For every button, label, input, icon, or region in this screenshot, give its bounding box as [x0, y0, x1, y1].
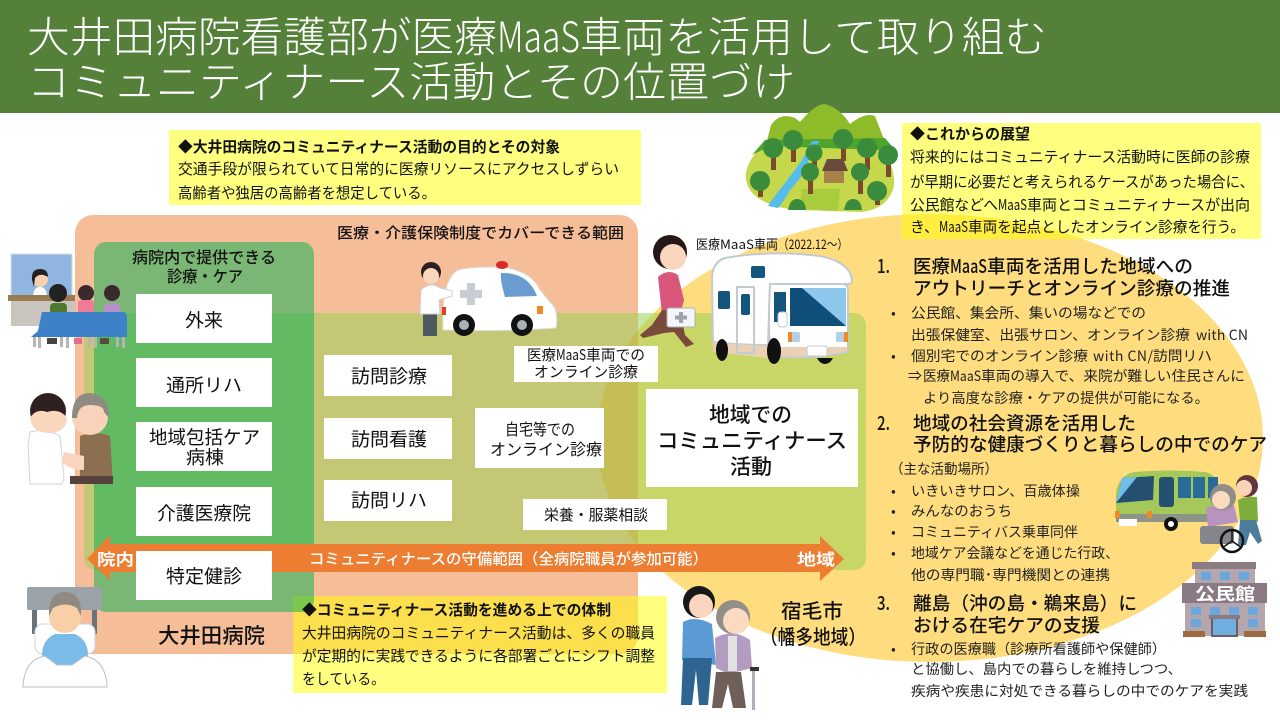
header: 車両を活用して取り組む	[580, 4, 1047, 65]
text block: item 1: より高度な診療・ケアの提供が可能になる。	[923, 388, 1209, 408]
icon: community center building: 公民館	[1195, 580, 1255, 605]
text block: item 1: 個別宅でのオンライン診療	[911, 346, 1088, 366]
panel: future outlook background	[902, 123, 1261, 239]
header	[0, 0, 1280, 113]
box: online care in MaaS vehicle	[514, 344, 658, 382]
label: MaaS vehicle date	[696, 234, 848, 253]
heading: in-hospital care	[132, 244, 276, 287]
box: home visit nursing	[324, 418, 452, 459]
box: home visit rehab	[324, 480, 452, 521]
box: online care in MaaS vehicle: MaaS	[556, 344, 586, 365]
text block: item 2: 地域ケア会議などを通じた行政、	[911, 543, 1119, 563]
text block: item 3: 離島（沖の島・鵜来島）に	[913, 589, 1137, 616]
panel: in-hospital care	[94, 242, 314, 612]
box: community care ward	[136, 422, 272, 471]
label: MaaS vehicle date: （2022.12～）	[778, 234, 848, 253]
text block: item 2: •	[891, 543, 896, 563]
text block: item 2: •	[891, 481, 896, 501]
box: home visit rehab: 訪問リハ	[351, 486, 427, 513]
text block: item 1: with CN	[1196, 325, 1248, 345]
text block: item 1: MaaS	[950, 366, 981, 386]
box: community nurse activity: 地域での	[709, 399, 792, 429]
text: organizational structure: 大井田病院のコミュニティナース活動は、多くの職員	[302, 622, 655, 643]
text block: item 2: いきいきサロン、百歳体操	[911, 481, 1080, 501]
text: future outlook: MaaS	[998, 194, 1027, 215]
icon: nurse running with medical kit	[640, 235, 695, 347]
icon: nurse and patient	[28, 393, 113, 484]
box: outpatient: 外来	[185, 306, 223, 333]
text block: item 2: 2.	[877, 409, 890, 436]
text block: item 1	[877, 252, 1248, 408]
region: Sukumo community ellipse	[597, 214, 1263, 662]
text block: item 1: 公民館、集会所、集いの場などでの	[911, 303, 1146, 323]
text: future outlook: が早期に必要だと考えられるケースがあった場合に、	[910, 171, 1254, 192]
box: community care ward: 病棟	[186, 443, 224, 470]
text block: item 1: MaaS	[950, 252, 987, 279]
text block: item 2	[877, 409, 1267, 585]
label: MaaS vehicle date: 医療	[696, 234, 720, 253]
header: コミュニティナース活動とその位置づけ	[27, 49, 795, 110]
panel: insurance coverage range	[75, 215, 638, 654]
text: future outlook: MaaS	[939, 216, 968, 237]
icon: patient in bed	[23, 587, 107, 687]
box: nutrition and medication consultation	[523, 499, 667, 530]
text block: item 3: 疾病や疾患に対処できる暮らしの中でのケアを実践	[911, 681, 1248, 701]
icon: community bus and wheelchair	[1115, 470, 1262, 552]
text block: item 1: •	[891, 346, 896, 366]
text block: item 1: with CN/	[1093, 346, 1154, 366]
box: health checkup	[136, 551, 272, 600]
text: future outlook: ◆これからの展望	[910, 123, 1030, 144]
label: Ooida hospital: 大井田病院	[158, 620, 265, 650]
text block: item 2: みんなのおうち	[911, 501, 1012, 521]
text block: item 2: •	[891, 522, 896, 542]
text block: item 2: 予防的な健康づくりと暮らしの中でのケア	[913, 430, 1267, 457]
header: 大井田病院看護部が医療	[27, 4, 497, 65]
label: MaaS vehicle date: MaaS	[720, 234, 754, 253]
text: organizational structure: ◆コミュニティナース活動を進める上での体制	[302, 599, 611, 620]
text block: item 2: 他の専門職･専門機関との連携	[911, 565, 1110, 585]
box: home visit nursing: 訪問看護	[351, 425, 427, 452]
text: organizational structure: をしている。	[302, 668, 385, 689]
text block: item 1: 出張保健室、出張サロン、オンライン診療	[911, 325, 1190, 345]
panel: community area	[84, 313, 866, 570]
header: MaaS	[497, 4, 580, 65]
text block: item 3: •	[891, 639, 896, 659]
box: online care at home: 自宅等での	[505, 416, 575, 440]
text block: item 1: 医療	[923, 366, 950, 386]
text: organizational structure	[302, 599, 655, 689]
box: nutrition and medication consultation: 栄養・服薬相談	[544, 504, 648, 525]
text block: item 2: 地域の社会資源を活用した	[913, 409, 1136, 436]
text block: item 1: アウトリーチとオンライン診療の推進	[913, 274, 1230, 301]
text: organizational structure: が定期的に実践できるように各部署ごとにシフト調整	[302, 645, 655, 666]
icon: hospital reception	[8, 254, 127, 348]
box: community nurse activity	[646, 389, 858, 487]
text block: item 2: （主な活動場所）	[890, 459, 998, 479]
box: day rehab	[136, 358, 272, 407]
text block: item 1: ⇒	[908, 366, 922, 386]
text block: item 1: 車両を活用した地域への	[987, 252, 1193, 279]
label: Sukumo city: 宿毛市	[781, 595, 843, 624]
text block: item 3	[877, 589, 1248, 701]
heading: insurance coverage: 医療・介護保険制度でカバーできる範囲	[337, 222, 624, 243]
text: future outlook: き、	[910, 216, 939, 237]
arrow: community nurse coverage	[87, 535, 844, 581]
text: future outlook: 車両を起点としたオンライン診療を行う。	[968, 216, 1245, 237]
label: Sukumo city: （幡多地域）	[760, 621, 866, 650]
heading: in-hospital care: 診療・ケア	[167, 263, 243, 287]
box: home visit medical: 訪問診療	[351, 362, 427, 389]
arrow: community nurse coverage: 地域	[797, 546, 835, 570]
box: community nurse activity: 活動	[730, 451, 772, 481]
icon: forest village	[746, 104, 898, 212]
text: purpose and target: 交通手段が限られていて日常的に医療リソースにアクセスしずらい	[178, 158, 619, 179]
label: Sukumo city	[760, 595, 866, 650]
text: purpose and target: ◆大井田病院のコミュニティナース活動の目的とその対象	[178, 136, 560, 157]
box: online care in MaaS vehicle: オンライン診療	[534, 361, 638, 382]
text block: item 3: おける在宅ケアの支援	[913, 611, 1100, 638]
arrow: community nurse coverage: 院内	[97, 546, 134, 570]
text block: item 3: 行政の医療職（診療所看護師や保健師）	[911, 639, 1166, 659]
text block: item 2: •	[891, 501, 896, 521]
text block: item 1: •	[891, 303, 896, 323]
icon: community center building	[1182, 562, 1267, 637]
text: purpose and target	[178, 136, 619, 203]
text block: item 3: と協働し、島内での暮らしを維持しつつ、	[911, 659, 1182, 679]
box: online care at home: オンライン診療	[490, 436, 602, 460]
box: long-term care hospital: 介護医療院	[157, 499, 251, 526]
icon: caregiver and elderly woman with cane	[681, 586, 759, 710]
label: MaaS vehicle date: 車両	[754, 234, 778, 253]
text block: item 1: 訪問リハ	[1153, 346, 1212, 366]
text: future outlook: 公民館などへ	[910, 194, 998, 215]
box: day rehab: 通所リハ	[166, 371, 242, 398]
text block: item 1: 医療	[913, 252, 950, 279]
text block: item 2: コミュニティバス乗車同伴	[911, 522, 1078, 542]
box: online care in MaaS vehicle: 車両での	[586, 344, 645, 365]
text: future outlook	[910, 123, 1254, 237]
text block: item 3: 3.	[877, 589, 890, 616]
box: community care ward: 地域包括ケア	[149, 423, 260, 450]
icon: doctor and ambulance	[420, 261, 557, 336]
box: long-term care hospital	[136, 487, 272, 536]
box: health checkup: 特定健診	[166, 562, 242, 589]
box: online care at home	[475, 408, 604, 468]
box: outpatient	[136, 294, 272, 343]
arrow: community nurse coverage: コミュニティナースの守備範囲（全病院職員が参加可能）	[309, 548, 708, 569]
box: community nurse activity: コミュニティナース	[657, 425, 847, 455]
box: home visit medical	[324, 355, 452, 396]
icon: MaaS camper vehicle	[712, 253, 852, 364]
panel: structure background	[293, 596, 667, 693]
text: purpose and target: 高齢者や独居の高齢者を想定している。	[178, 182, 436, 203]
panel: purpose background	[169, 130, 641, 205]
text block: item 1: 車両の導入で、来院が難しい住民さんに	[981, 366, 1245, 386]
text: future outlook: 将来的にはコミュニティナース活動時に医師の診療	[910, 146, 1250, 167]
text: future outlook: 車両とコミュニティナースが出向	[1027, 194, 1250, 215]
heading: in-hospital care: 病院内で提供できる	[132, 244, 276, 268]
text block: item 1: 1.	[877, 252, 890, 279]
box: online care in MaaS vehicle: 医療	[527, 344, 556, 365]
